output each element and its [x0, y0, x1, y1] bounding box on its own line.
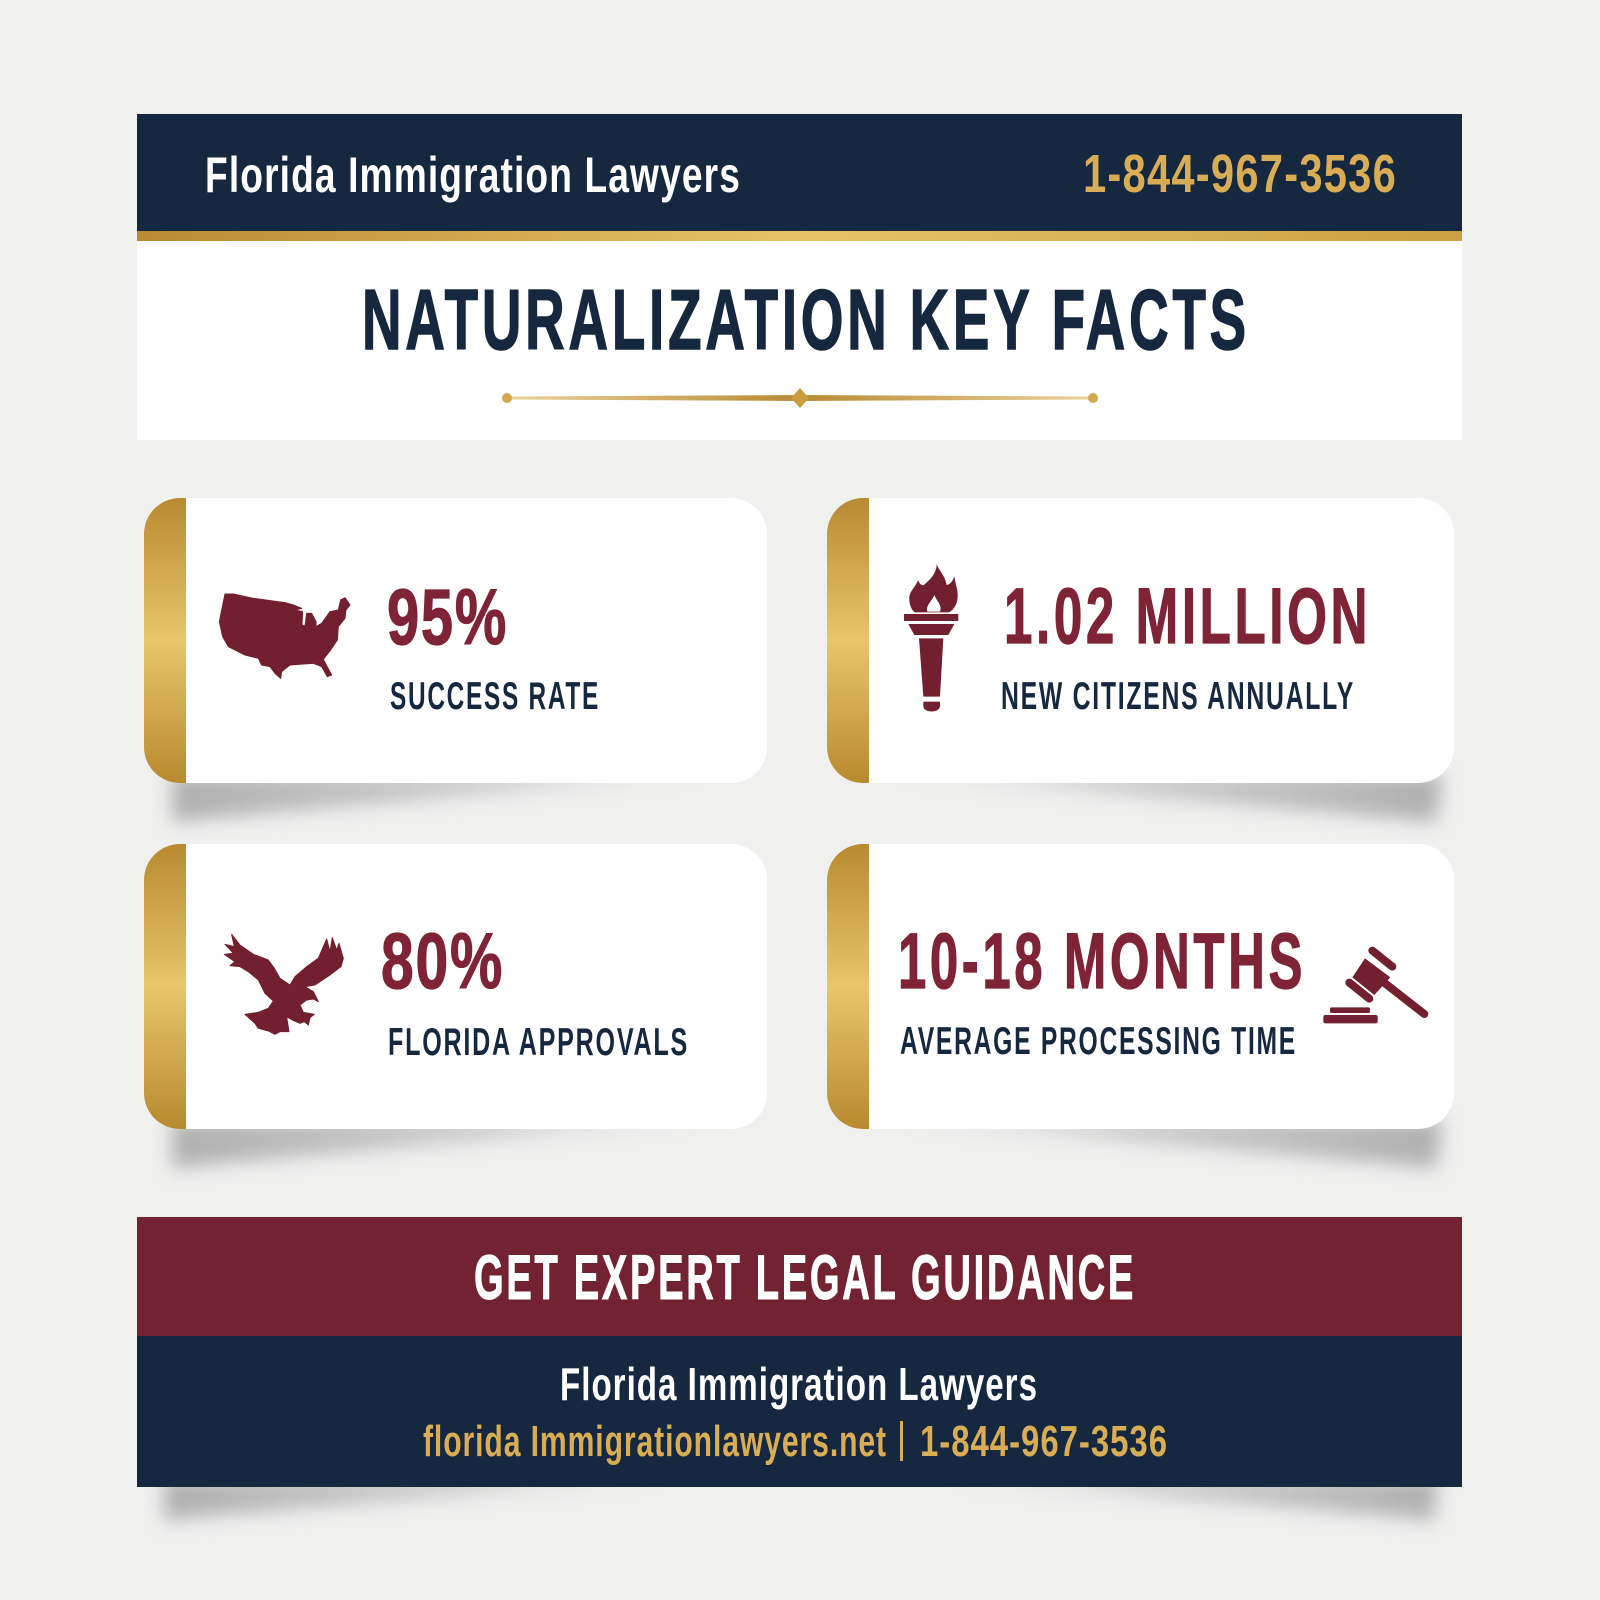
card: florida approvals: [144, 844, 767, 1129]
footer contact panel: [137, 1336, 1462, 1487]
stat: 95%: 95%: [387, 572, 508, 661]
icon: eagle: [224, 934, 343, 1034]
footer shadow: [164, 1478, 1438, 1520]
gold rule: [137, 231, 1462, 241]
label: success rate: SUCCESS RATE: [390, 675, 600, 718]
stat: 10-18 months: 10-18 MONTHS: [898, 916, 1306, 1005]
stat: 1.02 million: 1.02 MILLION: [1004, 571, 1371, 660]
header panel: [137, 114, 1462, 241]
footer firm name: Florida Immigration Lawyers: [560, 1358, 1038, 1410]
card: processing time: [827, 844, 1454, 1129]
footer separator: [900, 1421, 903, 1461]
label: new citizens annually: NEW CITIZENS ANNUALLY: [1001, 675, 1355, 718]
card: success rate: [144, 498, 767, 783]
header phone number: 1-844-967-3536: [1083, 144, 1397, 204]
title panel: [137, 241, 1462, 440]
stat: 80%: 80%: [381, 916, 504, 1005]
icon: torch: [904, 564, 958, 711]
footer phone number: 1-844-967-3536: [920, 1417, 1168, 1466]
card shadows: [172, 774, 1442, 1168]
label: average processing time: AVERAGE PROCESSING TIME: [900, 1020, 1297, 1063]
call to action heading: GET EXPERT LEGAL GUIDANCE: [474, 1243, 1136, 1313]
card: new citizens: [827, 498, 1454, 783]
icon: gavel: [1323, 951, 1424, 1023]
header firm name: Florida Immigration Lawyers: [205, 147, 741, 203]
footer call to action banner: [137, 1217, 1462, 1336]
title ornament: [502, 388, 1098, 408]
footer website: florida Immigrationlawyers.net: [423, 1417, 887, 1466]
label: florida approvals: FLORIDA APPROVALS: [388, 1021, 689, 1064]
icon: USA map: [219, 594, 350, 678]
